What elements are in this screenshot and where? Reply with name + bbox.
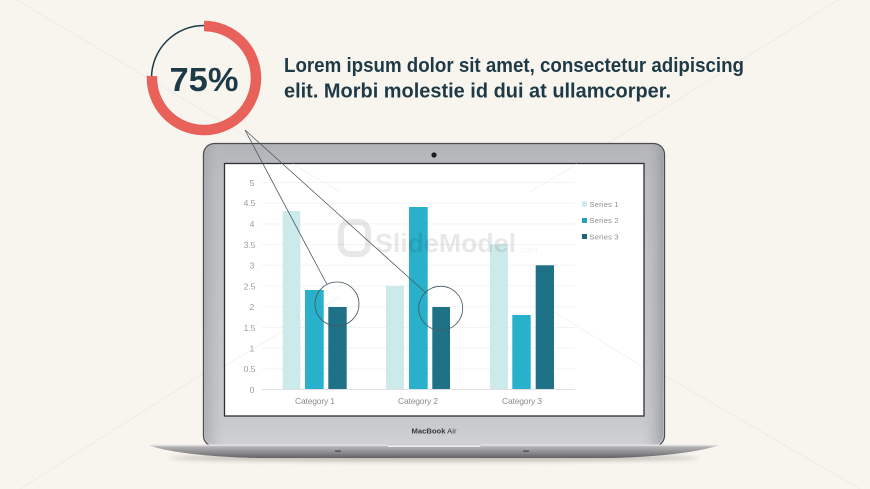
y axis labels: 2: [250, 302, 255, 312]
laptop base: [149, 445, 719, 458]
watermark: SlideModel: [375, 228, 516, 258]
screen: [224, 164, 644, 416]
camera: [431, 152, 437, 158]
description text: [284, 55, 744, 102]
donut 75%: [152, 26, 256, 130]
brand label: MacBook Air: [412, 426, 457, 436]
description text: Lorem ipsum dolor sit amet, consectetur adipiscing: [284, 55, 744, 77]
percentage: 75%: [170, 61, 238, 98]
category labels: [295, 396, 542, 406]
laptop lid: [204, 144, 664, 446]
description text: elit. Morbi molestie id dui at ullamcorper.: [284, 80, 671, 102]
y axis labels: 3.5: [244, 240, 256, 250]
y axis labels: 3: [250, 260, 255, 270]
remaining thin arc: [152, 26, 204, 78]
y axis labels: 0: [250, 385, 255, 395]
y axis labels: 2.5: [244, 282, 256, 292]
watermark: .com: [518, 245, 538, 255]
y axis labels: 5: [250, 178, 255, 188]
category 3 bars: [490, 244, 554, 389]
watermark: [341, 222, 538, 258]
category labels: Category 1: [295, 396, 335, 406]
category 1 bars: [283, 211, 347, 389]
legend: Series 3: [590, 232, 618, 242]
progress arc: [152, 26, 256, 130]
y axis labels: 1: [250, 344, 255, 354]
laptop: [149, 144, 719, 462]
category labels: Category 3: [502, 396, 542, 406]
callout lines: [245, 130, 463, 330]
legend: Series 2: [590, 216, 618, 225]
y axis labels: 4: [250, 219, 255, 229]
chart: [244, 178, 618, 406]
y axis labels: 0.5: [244, 364, 256, 374]
y axis labels: 4.5: [244, 198, 256, 208]
y axis labels: [244, 178, 256, 395]
laptop base shadow: [169, 454, 699, 462]
legend: Series 1: [590, 200, 618, 209]
gridlines: [262, 182, 575, 390]
category 2 bars: [386, 207, 450, 389]
legend: [582, 200, 618, 242]
y axis labels: 1.5: [244, 323, 256, 333]
category labels: Category 2: [398, 396, 438, 406]
